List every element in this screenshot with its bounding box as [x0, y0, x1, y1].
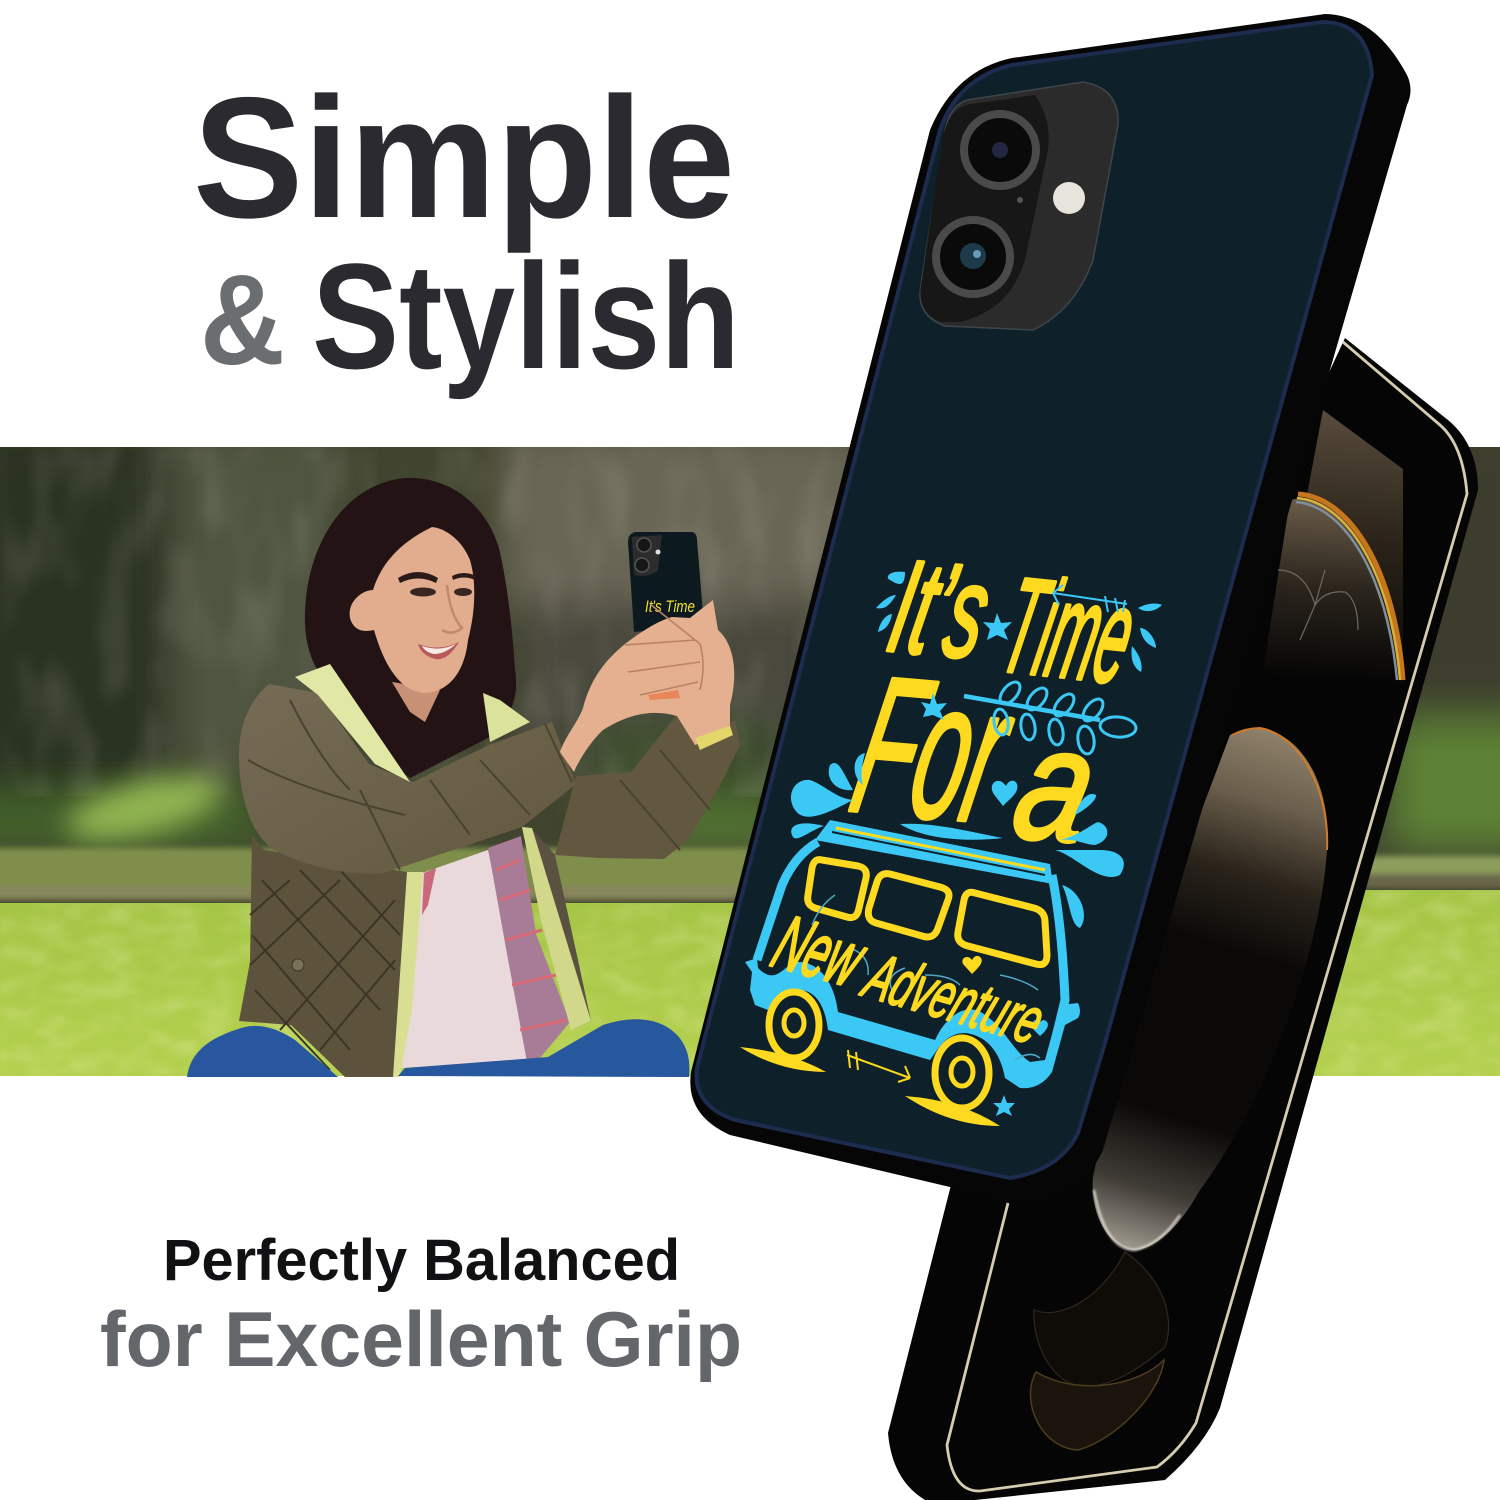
- Adventure: Adventure: [852, 940, 1055, 1058]
- jacket lining right: [522, 827, 591, 1030]
- mic: [1017, 197, 1023, 203]
- van body outline: [757, 842, 1065, 1080]
- near arm sleeve: [239, 684, 576, 874]
- wallpaper star lines: [1278, 570, 1358, 640]
- phone peeking between fingers: [648, 690, 680, 700]
- artwork: It's Time For a New Adventure: [740, 533, 1162, 1126]
- heading: Simple & Stylish: [193, 62, 740, 400]
- woman taking a selfie: [187, 478, 740, 1077]
- subheading: Perfectly Balanced for Excellent Grip: Perfectly Balanced: [163, 1228, 680, 1293]
- wallpaper highlight rim: [1094, 1190, 1180, 1250]
- rear phone: [888, 338, 1478, 1500]
- rear phone gold rim: [947, 342, 1467, 1491]
- small phone in hand: It's Time: [645, 597, 695, 616]
- shirt: [398, 850, 527, 1068]
- wallpaper disc under rainbow: [1260, 498, 1403, 690]
- subheading: Perfectly Balanced for Excellent Grip: [100, 1228, 742, 1383]
- rear phone black case: [888, 338, 1478, 1500]
- sleeve folds: [248, 700, 710, 870]
- left wheel: [740, 992, 826, 1072]
- heading: Simple & Stylish: Simple: [193, 62, 735, 254]
- headline It's: It’s: [877, 533, 1003, 686]
- lens housing: [920, 95, 1049, 322]
- headline For: For: [837, 636, 1031, 864]
- subheading: Perfectly Balanced for Excellent Grip: for Excellent Grip: [100, 1295, 742, 1383]
- fingers: [625, 604, 703, 695]
- lens rim: [1232, 728, 1327, 850]
- jeans right: [398, 1019, 689, 1077]
- rear wallpaper wedge: [1270, 410, 1403, 690]
- facial features: [398, 572, 476, 659]
- stars and hearts: [921, 613, 1048, 1116]
- jacket right panel: [531, 828, 591, 1029]
- far arm sleeve: [555, 713, 740, 859]
- jacket pocket button: [292, 959, 304, 971]
- van roof rack: [815, 820, 1053, 884]
- jacket quilting: [250, 870, 400, 1070]
- mid wallpaper lobe: [1034, 1252, 1169, 1387]
- headline a: a: [1000, 694, 1113, 877]
- collar right: [483, 693, 530, 742]
- lower lens: [936, 220, 1010, 294]
- rack shadow: [832, 832, 1045, 875]
- camera island: [920, 82, 1118, 330]
- navy rim and glass panel: [696, 22, 1372, 1178]
- front phone case: [690, 14, 1410, 1200]
- window 2: [868, 874, 949, 937]
- jacket lining left: [393, 872, 423, 1077]
- lifestyle photo background: [0, 430, 1500, 1076]
- artwork: It's Time For a New Adventure: Time: [989, 549, 1149, 711]
- jeans left: [187, 1026, 338, 1077]
- right wheel: [905, 1038, 1000, 1126]
- bracelet: [695, 726, 733, 750]
- rack line: [836, 828, 1045, 870]
- upper lens: [964, 114, 1036, 186]
- hair: [305, 478, 516, 778]
- van lower body: [745, 958, 1080, 1088]
- small phone in hand: [628, 532, 704, 632]
- neck: [392, 682, 440, 722]
- heading: Simple & Stylish: Stylish: [312, 232, 740, 400]
- large wallpaper lens: [1093, 728, 1328, 1250]
- plaid overshirt: [488, 836, 570, 1062]
- leaf branch: [964, 679, 1137, 755]
- hands: [560, 600, 734, 772]
- van: [740, 820, 1080, 1126]
- jacket body: [239, 835, 407, 1077]
- heading: Simple & Stylish: &: [200, 249, 285, 392]
- window 1: [808, 860, 866, 918]
- New: New: [761, 899, 879, 1003]
- floral details: [812, 895, 1040, 1060]
- heart yellow: [962, 956, 982, 974]
- case body: [690, 14, 1410, 1200]
- rainbow arc: [1296, 494, 1403, 680]
- collar: [295, 664, 410, 782]
- splashes: [791, 572, 1162, 928]
- small plaid at left: [422, 868, 436, 915]
- lower wallpaper lobe: [1030, 1360, 1164, 1450]
- face: [350, 527, 474, 693]
- bottom arrow: [847, 1050, 910, 1082]
- window 3: [958, 892, 1047, 965]
- top arrow: [1053, 585, 1127, 612]
- flash: [1053, 182, 1085, 214]
